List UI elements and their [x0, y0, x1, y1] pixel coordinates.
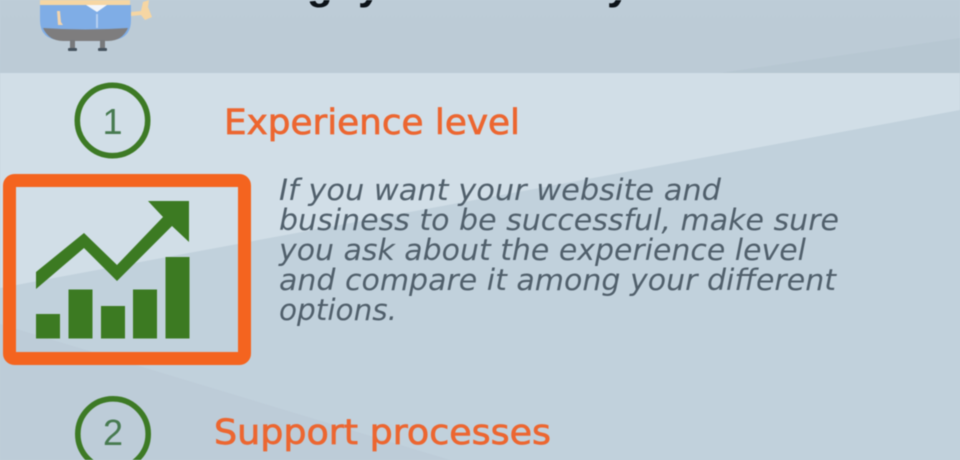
number badge 2	[78, 399, 148, 460]
bar chart	[36, 257, 190, 338]
body text: experience level	[278, 173, 839, 327]
body text: experience level: If you want your website and	[279, 173, 722, 207]
number badge 1: 1	[102, 101, 123, 142]
body text: experience level: you ask about the experience level	[278, 233, 806, 267]
number badge 1	[77, 85, 148, 156]
trend arrow	[36, 201, 189, 289]
number badge 2: 2	[103, 412, 123, 453]
icon: growth chart in orange frame	[10, 180, 244, 358]
heading: experience level: Experience level	[224, 103, 520, 143]
heading: support processes: Support processes	[214, 413, 551, 453]
body text: experience level: business to be successful, make sure	[279, 203, 839, 237]
body text: experience level: and compare it among your different	[279, 263, 838, 297]
chart frame	[10, 180, 244, 358]
icon: cartoon character	[40, 0, 152, 51]
body text: experience level: options.	[279, 293, 397, 327]
header band	[0, 0, 960, 73]
